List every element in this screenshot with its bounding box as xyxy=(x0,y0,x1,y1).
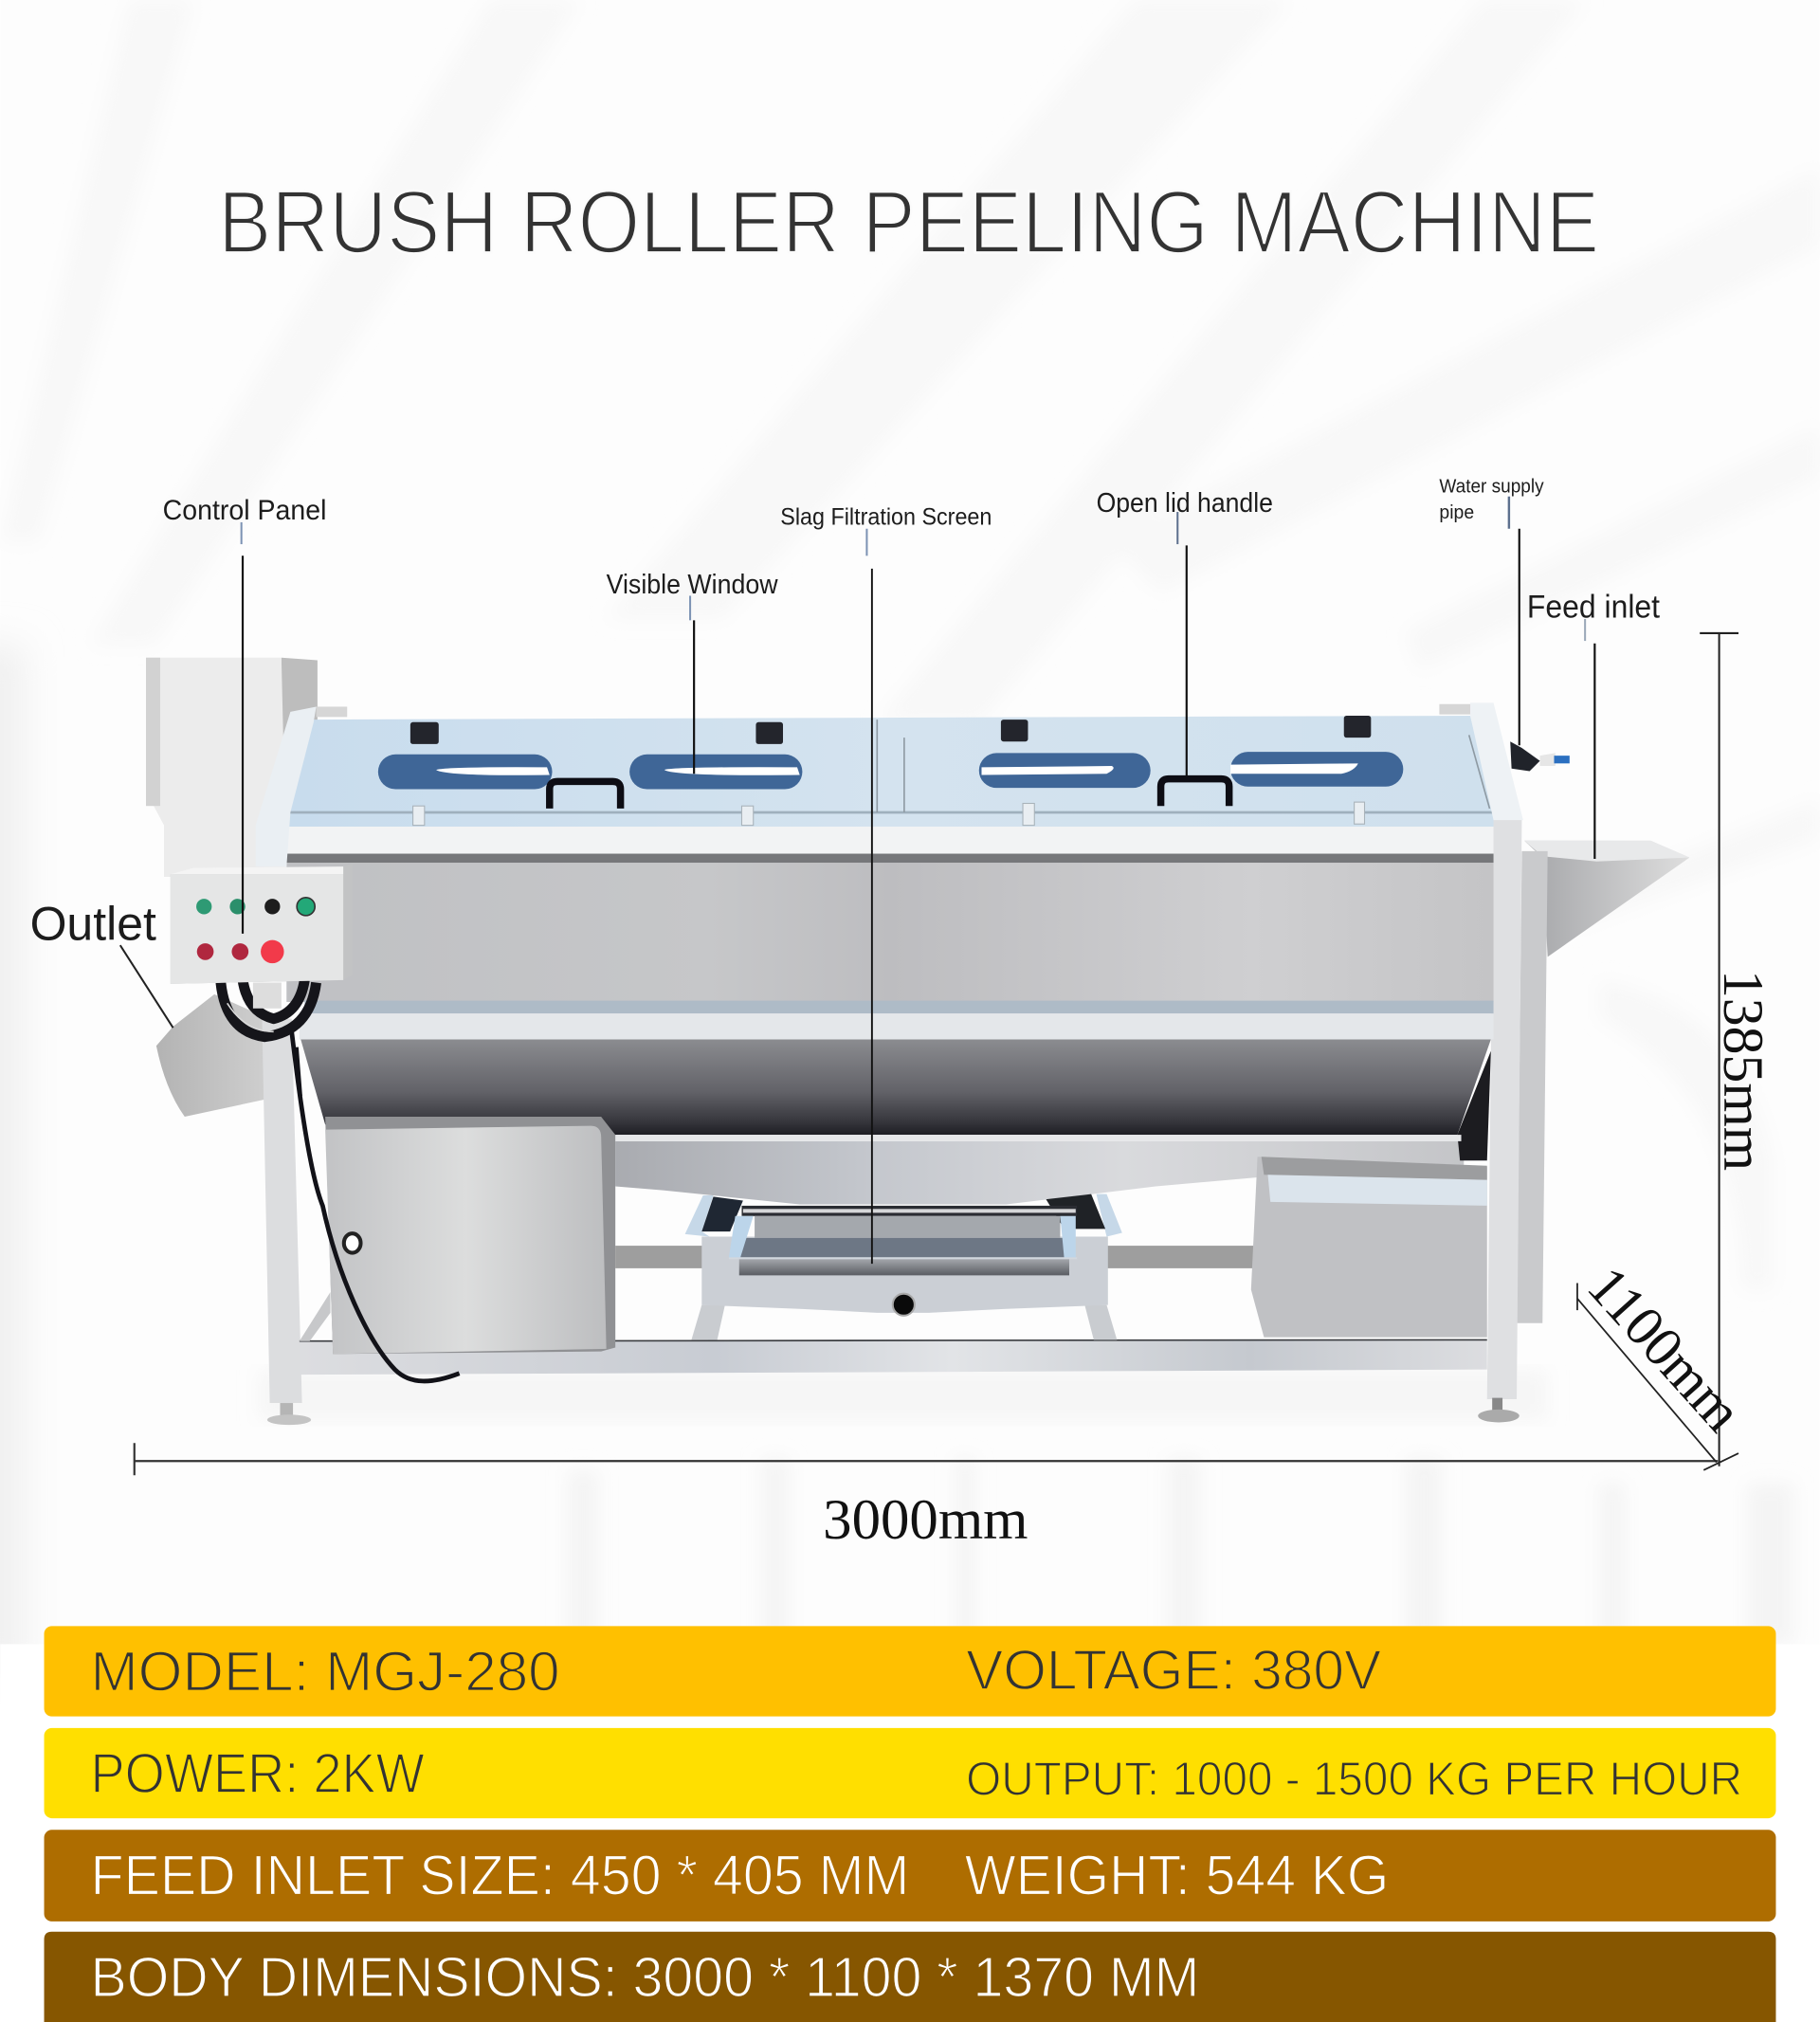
spec bar: body dimensions: BODY DIMENSIONS: 3000 * 1100 * 1370 MM xyxy=(91,1945,1199,2009)
dimension: height 1385mm: 1385mm xyxy=(1712,970,1774,1171)
left post xyxy=(262,1019,302,1403)
label: Outlet: Outlet xyxy=(30,897,156,951)
label: Visible Window: Visible Window xyxy=(607,570,778,600)
dimension: width 3000mm xyxy=(135,1443,1718,1551)
label: Outlet xyxy=(30,897,173,1028)
spec bar: body dimensions xyxy=(45,1932,1775,2022)
outlet chute xyxy=(156,994,268,1117)
spec bar: power and output xyxy=(45,1728,1775,1818)
spec bar: feed inlet size and weight xyxy=(45,1830,1775,1922)
spec bar: model and voltage: VOLTAGE: 380V xyxy=(966,1638,1382,1702)
control column xyxy=(146,658,318,877)
hopper: feed inlet xyxy=(1524,841,1689,956)
label: Water supply pipe: Water supply xyxy=(1439,477,1544,498)
lower frame bars and brace xyxy=(300,1246,1487,1375)
label: Water supply pipe xyxy=(1439,477,1544,745)
spec bar: power and output: POWER: 2KW xyxy=(91,1741,425,1805)
dimension: depth 1100mm: 1100mm xyxy=(1575,1255,1755,1443)
lid handles xyxy=(550,779,1229,809)
label: Slag Filtration Screen: Slag Filtration Screen xyxy=(780,504,992,531)
label: Water supply pipe: pipe xyxy=(1439,502,1474,523)
spec bar: feed inlet size and weight: WEIGHT: 544 KG xyxy=(965,1843,1389,1906)
control panel box xyxy=(171,864,353,984)
label: Control Panel: Control Panel xyxy=(163,495,326,526)
lid windows xyxy=(378,752,1403,790)
drum highlight bands xyxy=(300,1001,1494,1039)
valve: water pipe xyxy=(1510,741,1570,771)
door cabinet xyxy=(325,1117,615,1354)
spec bar: power and output: OUTPUT: 1000 - 1500 KG PER HOUR xyxy=(966,1752,1742,1806)
right cabinet xyxy=(1251,1157,1487,1338)
drain tray xyxy=(685,1194,1122,1316)
feet xyxy=(267,1398,1520,1425)
label: Open lid handle: Open lid handle xyxy=(1097,488,1273,519)
lid clips xyxy=(413,802,1365,826)
machine illustration xyxy=(146,658,1689,1425)
spec bar: model and voltage xyxy=(45,1626,1775,1717)
spec bar: model and voltage: MODEL: MGJ-280 xyxy=(91,1639,560,1703)
trough under drum xyxy=(615,1141,1464,1205)
spec bar: feed inlet size and weight: FEED INLET SIZE: 450 * 405 MM xyxy=(91,1843,909,1906)
label: Feed inlet: Feed inlet xyxy=(1527,590,1661,626)
dimension: height 1385mm xyxy=(1700,633,1774,1466)
upper drum body xyxy=(286,863,1494,1002)
right post xyxy=(1487,815,1521,1399)
title: BRUSH ROLLER PEELING MACHINE xyxy=(218,173,1599,272)
dimension: width 3000mm: 3000mm xyxy=(823,1488,1028,1551)
lid hinges xyxy=(410,716,1371,744)
power cable xyxy=(292,1031,460,1381)
cable coil xyxy=(221,980,317,1037)
dark lower drum xyxy=(300,1039,1491,1135)
lid assembly xyxy=(256,702,1523,866)
right rear panel xyxy=(1517,851,1548,1323)
